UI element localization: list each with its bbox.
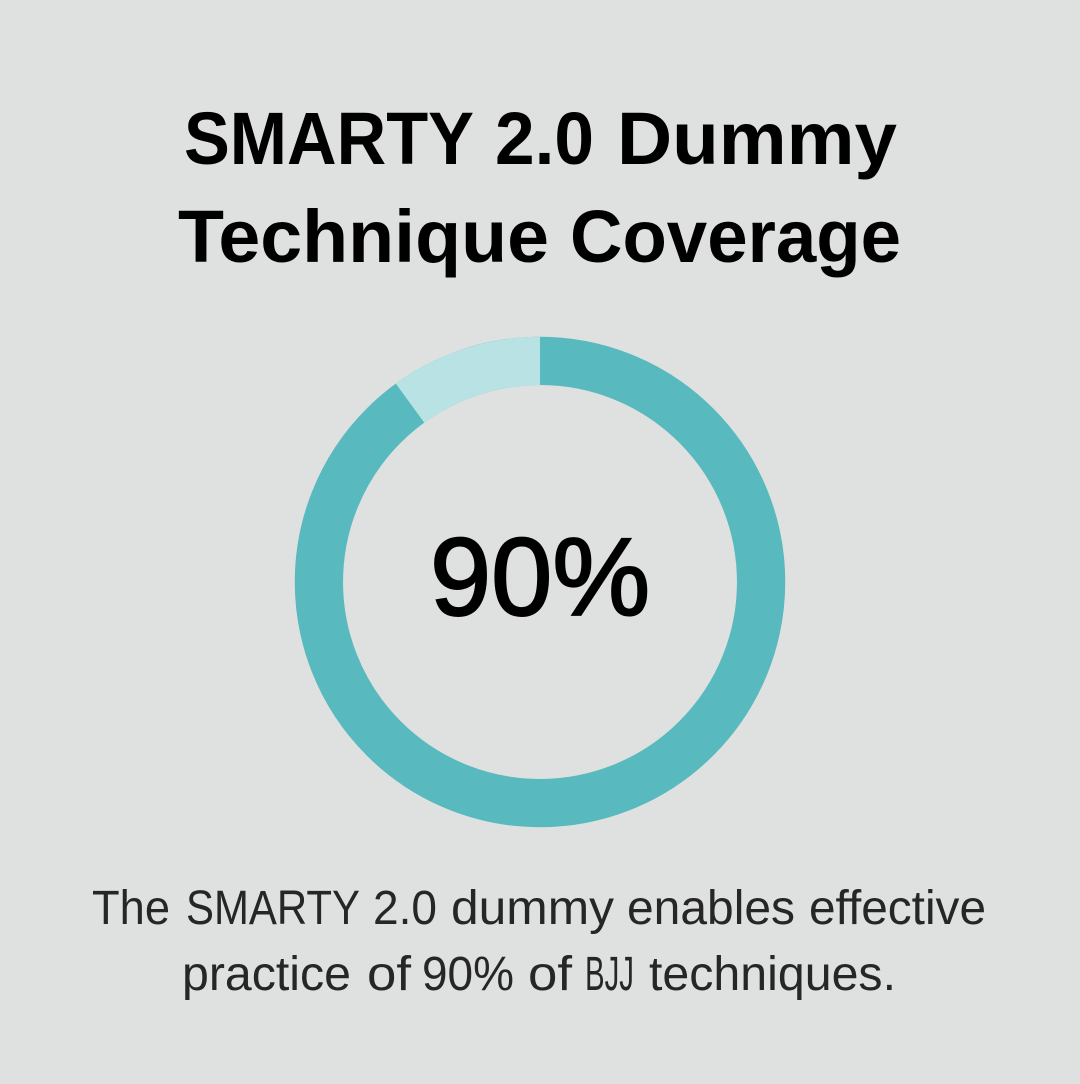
title bbox=[178, 97, 901, 278]
title: Dummy bbox=[617, 97, 897, 180]
title: Coverage bbox=[570, 195, 901, 278]
caption: enables bbox=[627, 882, 795, 935]
title: 2.0 bbox=[495, 97, 594, 180]
caption: techniques. bbox=[649, 948, 896, 1001]
donut chart: 90% coverage bbox=[319, 361, 761, 803]
caption: of bbox=[528, 948, 573, 1001]
caption: SMARTY bbox=[186, 882, 360, 935]
caption: 90% bbox=[422, 948, 514, 1001]
caption bbox=[92, 882, 986, 1001]
caption: dummy bbox=[451, 882, 614, 935]
caption: BJJ bbox=[585, 948, 634, 1001]
caption: The bbox=[92, 882, 170, 935]
caption: practice bbox=[182, 948, 351, 1001]
caption: of bbox=[367, 948, 412, 1001]
caption: 2.0 bbox=[373, 882, 437, 935]
title: Technique bbox=[178, 195, 549, 278]
donut centre value: 90% bbox=[430, 516, 650, 639]
caption: effective bbox=[809, 882, 986, 935]
title: SMARTY bbox=[184, 97, 474, 180]
